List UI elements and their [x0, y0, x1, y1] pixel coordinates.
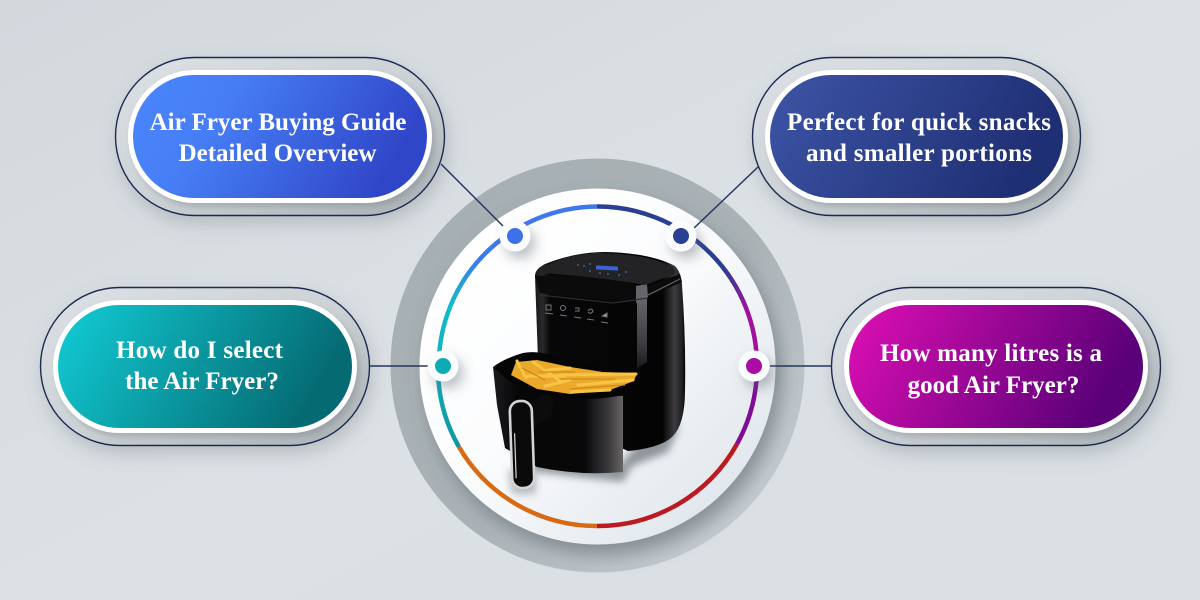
heading: right callout text: good Air Fryer? — [908, 372, 1079, 399]
heading: left callout text — [116, 337, 284, 395]
connector lines — [370, 164, 831, 366]
body reflection — [637, 295, 647, 368]
panel: top-right callout — [752, 58, 1080, 216]
icon: blue node — [500, 220, 530, 252]
icon: navy node — [666, 220, 696, 252]
heading: top-right callout text: and smaller portions — [806, 140, 1032, 167]
icon: magenta node — [738, 350, 770, 382]
heading: top-left callout text: Detailed Overview — [179, 140, 376, 167]
drawer body — [493, 367, 623, 473]
heading: left callout text: How do I select — [116, 337, 284, 364]
cast shadows — [505, 425, 680, 482]
basket rim — [493, 352, 645, 399]
fries — [511, 360, 637, 394]
heading: left callout text: the Air Fryer? — [125, 368, 279, 395]
handle — [509, 401, 534, 488]
display — [577, 263, 627, 276]
panel: left callout — [40, 288, 370, 446]
icon: teal node — [428, 350, 458, 382]
heading: top-left callout text — [150, 109, 406, 167]
lid glossy band — [535, 274, 682, 303]
panel: central circle — [390, 158, 804, 572]
panel: top-left callout — [116, 58, 444, 216]
panel: right callout — [832, 288, 1160, 446]
heading: top-left callout text: Air Fryer Buying Guide — [150, 109, 406, 136]
heading: right callout text — [880, 340, 1102, 399]
icon: air fryer — [493, 252, 685, 494]
control icons — [545, 305, 608, 323]
lid top — [542, 253, 675, 285]
main body — [535, 252, 685, 451]
heading: right callout text: How many litres is a — [880, 340, 1102, 367]
heading: top-right callout text: Perfect for quick snacks — [787, 109, 1051, 136]
drawer handle arm — [530, 393, 553, 428]
heading: top-right callout text — [787, 109, 1051, 167]
colored ring — [438, 206, 757, 526]
